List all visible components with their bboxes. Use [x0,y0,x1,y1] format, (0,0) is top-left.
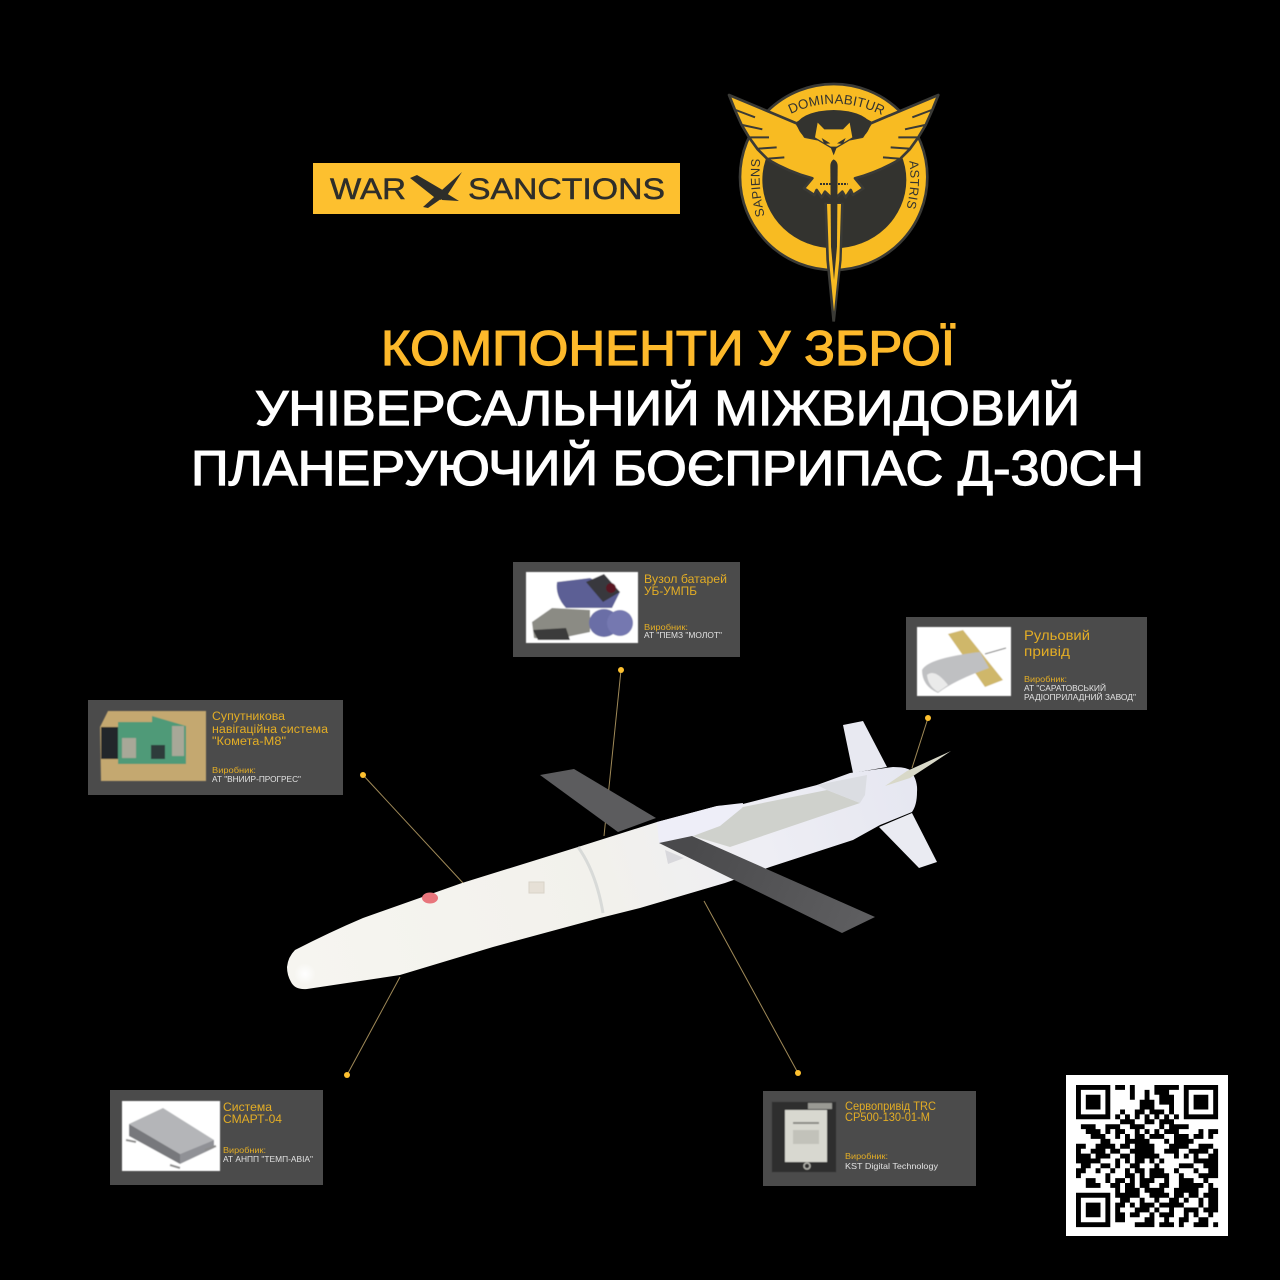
leader lines [344,667,931,1078]
title: УНІВЕРСАЛЬНИЙ МІЖВИДОВИЙ [255,381,1080,436]
panel: battery unit: Вузол батарей [644,572,727,586]
icon: battery assembly [526,572,638,643]
panel: satellite navigation: АТ "ВНИИР-ПРОГРЕС" [212,775,301,784]
panel: rudder actuator: привід [1024,644,1070,659]
emblem: owl and dagger: SAPIENS [750,159,764,216]
panel: TRC servo: Сервопривід TRC [845,1101,936,1113]
panel: battery unit: УБ-УМПБ [644,584,697,598]
panel: satellite navigation: Виробник: [212,766,256,775]
panel: SMART-04 system: Система [223,1100,272,1114]
panel: rudder actuator: Виробник: [1024,675,1067,684]
emblem: owl and dagger [728,82,940,322]
logo: War Sanctions: SANCTIONS [468,173,665,206]
emblem: owl and dagger: ASTRIS [907,161,920,209]
panel: battery unit [513,562,740,657]
title [191,322,1144,496]
panel: TRC servo: СР500-130-01-М [845,1112,930,1124]
panel: SMART-04 system: Виробник: [223,1146,266,1155]
panel: SMART-04 system: АТ АНПП "ТЕМП-АВІА" [223,1155,313,1164]
title: КОМПОНЕНТИ У ЗБРОЇ [381,322,955,376]
panel: TRC servo [763,1091,976,1186]
icon: metal box [122,1101,220,1171]
panel: battery unit: АТ "ПЕМЗ "МОЛОТ" [644,631,722,640]
panel: satellite navigation [88,700,343,795]
panel: TRC servo: KST Digital Technology [845,1161,939,1171]
QR code [1066,1075,1228,1236]
emblem: owl and dagger: DOMINABITUR [788,94,884,115]
panel: satellite navigation: Супутникова [212,711,286,723]
icon: circuit board [100,711,206,781]
title: ПЛАНЕРУЮЧИЙ БОЄПРИПАС Д-30СН [191,441,1144,496]
panel: rudder actuator: Рульовий [1024,628,1090,643]
logo: War Sanctions [313,163,680,214]
logo: War Sanctions: WAR [330,173,406,206]
panel: satellite navigation: навігаційна система [212,724,329,736]
panel: TRC servo: Виробник: [845,1151,888,1161]
panel: battery unit: Виробник: [644,623,688,632]
icon: actuator [917,627,1011,696]
missile illustration [287,721,951,989]
panel: SMART-04 system [110,1090,323,1185]
panel: satellite navigation: "Комета-М8" [212,736,286,748]
near wing [659,836,875,933]
rear wing [540,769,656,832]
icon: servo unit [772,1102,836,1172]
panel: rudder actuator [906,617,1147,710]
panel: SMART-04 system: СМАРТ-04 [223,1112,282,1126]
panel: rudder actuator: РАДІОПРИЛАДНИЙ ЗАВОД" [1024,693,1136,702]
panel: rudder actuator: АТ "САРАТОВСЬКИЙ [1024,684,1106,693]
